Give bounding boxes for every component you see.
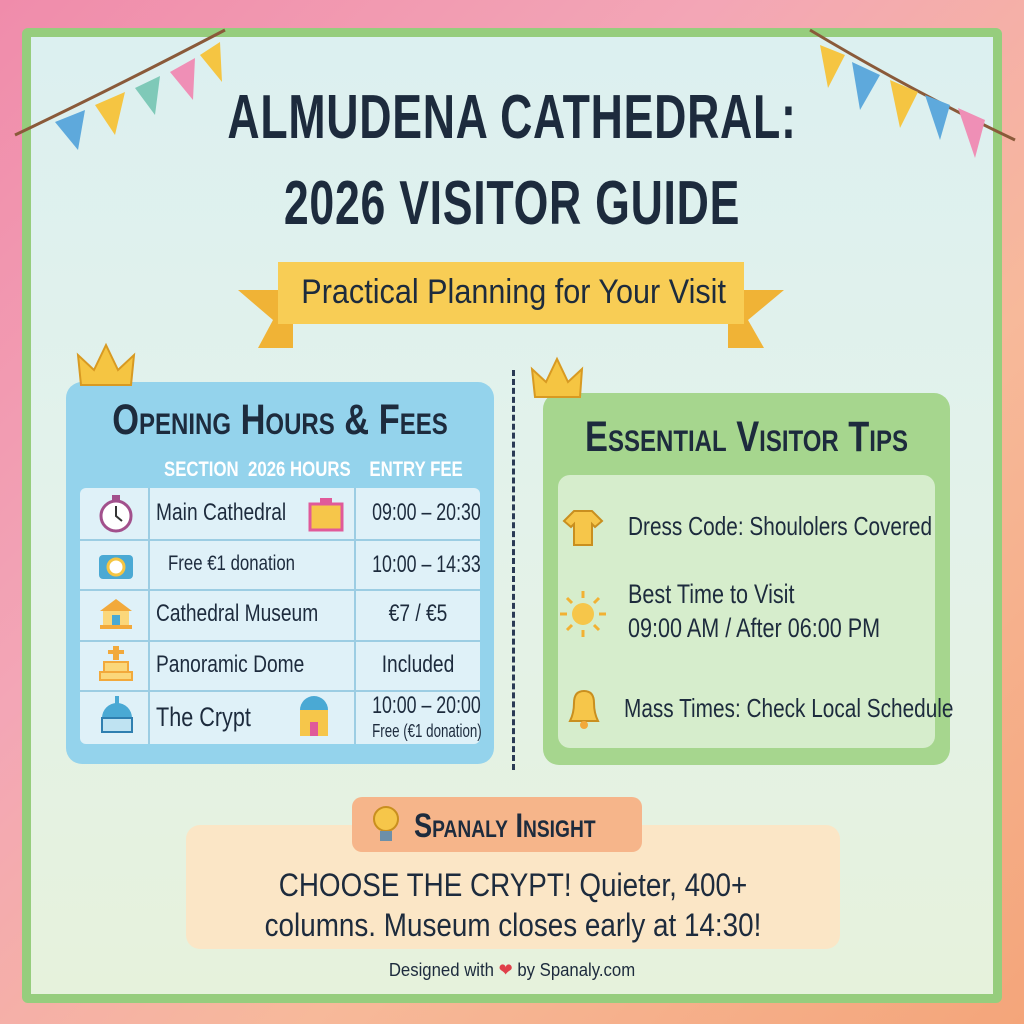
tip: mass times — [568, 690, 953, 729]
icon: bag — [308, 498, 344, 532]
heading: tips: Essential Visitor Tips — [585, 413, 908, 461]
title: ALMUDENA CATHEDRAL: — [227, 83, 797, 152]
row: museum: €7 / €5 — [389, 600, 447, 627]
row: crypt — [101, 692, 482, 741]
icon: church — [101, 696, 133, 733]
row: museum — [100, 599, 447, 629]
icon: stopwatch — [100, 495, 132, 532]
insight text: columns. Museum closes early at 14:30! — [265, 907, 761, 943]
panel: visitor tips — [543, 393, 950, 765]
ribbon subtitle — [238, 262, 784, 348]
icon: crown left — [76, 342, 136, 386]
row: crypt: Free (€1 donation) — [372, 721, 482, 741]
insight tag — [352, 797, 642, 852]
panel: insight — [186, 797, 840, 949]
row: dome — [99, 646, 454, 681]
panel: opening hours — [66, 382, 494, 764]
title — [227, 83, 797, 238]
row: donation: 10:00 – 14:33 — [372, 551, 481, 578]
bunting right — [809, 28, 1016, 158]
insight text: CHOOSE THE CRYPT! Quieter, 400+ — [279, 867, 747, 903]
tip: dress code — [562, 510, 932, 546]
insight tag: Spanaly Insight — [414, 807, 596, 845]
row: main cathedral: 09:00 – 20:30 — [372, 499, 481, 526]
footer: Designed with ❤ by Spanaly.com — [389, 960, 635, 980]
row: donation — [99, 551, 481, 579]
title: 2026 VISITOR GUIDE — [284, 169, 740, 238]
bunting left — [14, 28, 226, 150]
divider — [512, 370, 515, 770]
icon: camera — [99, 555, 133, 579]
row: museum: Cathedral Museum — [156, 600, 318, 627]
row: dome: Included — [382, 651, 454, 678]
ribbon subtitle: Practical Planning for Your Visit — [301, 273, 726, 311]
icon: museum — [100, 599, 132, 629]
row: crypt: 10:00 – 20:00 — [372, 692, 481, 719]
icon: sun — [560, 591, 606, 637]
insight text — [265, 867, 761, 943]
row: donation: Free €1 donation — [168, 552, 295, 575]
row: dome: Panoramic Dome — [156, 651, 304, 678]
row: main cathedral: Main Cathedral — [156, 499, 286, 526]
tips box — [558, 475, 935, 748]
table — [80, 488, 480, 744]
icon: crown right — [530, 356, 584, 398]
icon: shirt — [562, 510, 604, 546]
tip: best time — [560, 579, 880, 643]
tip: dress code: Dress Code: Shoulolers Covered — [628, 511, 932, 541]
icon: dome — [99, 646, 133, 681]
icon: bulb — [373, 806, 399, 841]
table header: SECTION 2026 HOURS ENTRY FEE — [164, 458, 463, 481]
icon: bell — [568, 690, 600, 729]
row: main cathedral — [100, 495, 481, 532]
heading: opening hours: Opening Hours & Fees — [112, 396, 448, 444]
tip: best time: 09:00 AM / After 06:00 PM — [628, 613, 880, 643]
row: crypt: The Crypt — [156, 702, 251, 732]
tip: best time: Best Time to Visit — [628, 579, 794, 609]
tip: mass times: Mass Times: Check Local Schedule — [624, 693, 953, 723]
icon: tower — [300, 696, 328, 736]
